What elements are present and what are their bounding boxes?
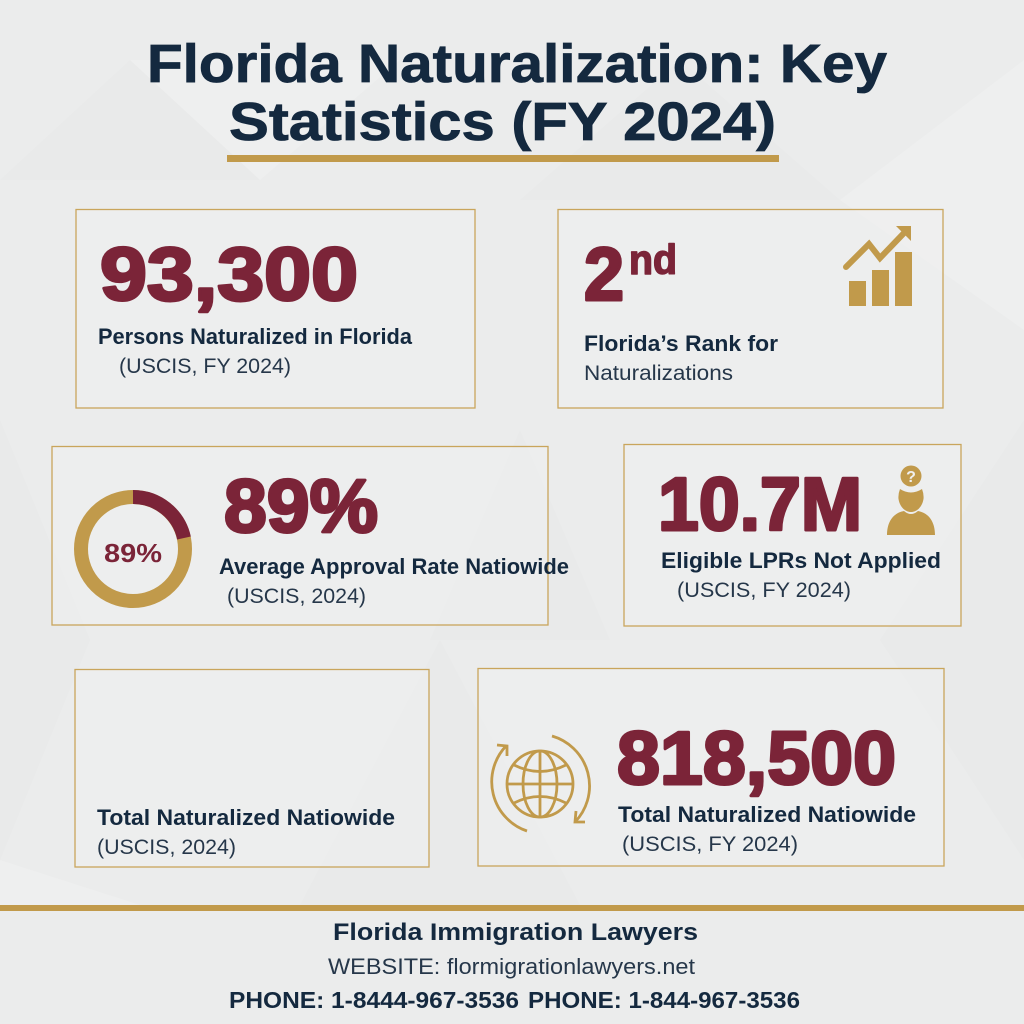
panel: approval rate xyxy=(52,446,569,625)
icon: person with question mark xyxy=(887,466,935,535)
label: eligible LPRs: Eligible LPRs Not Applied xyxy=(661,548,941,573)
label: total naturalized: Total Naturalized Natiowide xyxy=(618,802,916,827)
statistic: 818,500: 818,500 xyxy=(617,716,896,800)
source: (USCIS, 2024) xyxy=(97,836,236,859)
footer divider xyxy=(0,905,1024,911)
icon: globe with circular arrows xyxy=(492,736,590,831)
icon: rising bar chart xyxy=(846,226,912,306)
title: Florida Naturalization: Key xyxy=(147,34,887,94)
phone numbers: PHONE: 1-8444-967-3536 xyxy=(229,987,519,1013)
source: (USCIS, FY 2024) xyxy=(677,579,851,602)
source: (USCIS, FY 2024) xyxy=(119,355,291,378)
ordinal suffix: nd xyxy=(629,236,677,283)
phone numbers: PHONE: 1-844-967-3536 xyxy=(528,987,800,1013)
label: persons naturalized: Persons Naturalized in Florida xyxy=(98,324,413,349)
panel: total naturalized, left xyxy=(75,670,429,867)
donut chart: 89%: 89% xyxy=(104,538,162,568)
label: approval rate: Average Approval Rate Natiowide xyxy=(219,554,569,579)
statistic: 10.7M: 10.7M xyxy=(658,462,862,546)
statistic: 93,300: 93,300 xyxy=(100,232,358,316)
footer contact block xyxy=(229,919,800,1013)
panel: eligible LPRs xyxy=(624,444,961,626)
statistic: 89%: 89% xyxy=(224,464,378,548)
source: (USCIS, 2024) xyxy=(227,585,366,608)
icon: person with question mark: ? xyxy=(906,469,916,486)
website: WEBSITE: flormigrationlawyers.net xyxy=(328,954,695,979)
label: naturalizations: Naturalizations xyxy=(584,362,733,385)
panel: total naturalized, right xyxy=(478,668,944,866)
label: total naturalized: Total Naturalized Natiowide xyxy=(97,805,395,830)
panel: persons naturalized in Florida xyxy=(76,210,475,408)
title xyxy=(147,34,887,152)
source: (USCIS, FY 2024) xyxy=(622,833,798,856)
title underline xyxy=(227,155,779,162)
statistic: 2nd: 2 xyxy=(584,232,624,316)
phone numbers xyxy=(229,987,800,1013)
title: Statistics (FY 2024) xyxy=(229,92,776,152)
label: rank: Florida’s Rank for xyxy=(584,331,778,356)
donut chart: 89% xyxy=(81,497,185,601)
panel: Florida rank xyxy=(558,210,943,408)
firm name: Florida Immigration Lawyers xyxy=(333,919,698,946)
